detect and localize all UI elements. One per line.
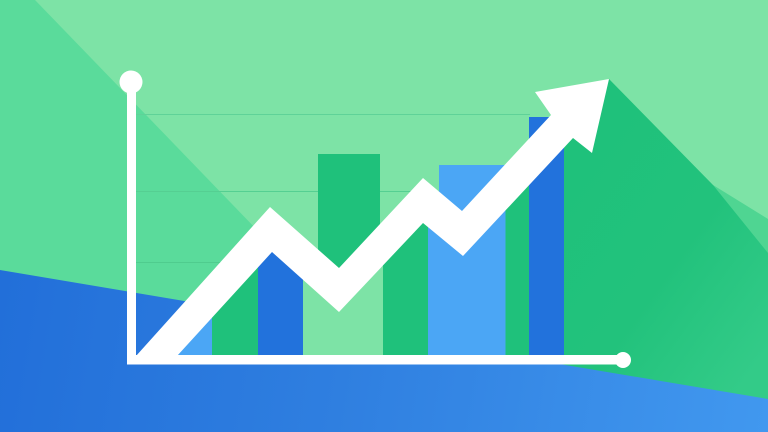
y axis end dot xyxy=(120,70,142,94)
background: right mid-green band xyxy=(700,185,768,270)
background: right dark green slope xyxy=(555,79,768,405)
x axis end dot xyxy=(615,352,631,368)
bar 8: blue xyxy=(529,117,564,356)
bar 4: green upper section xyxy=(318,154,380,290)
bar 5: green xyxy=(383,200,428,356)
bar 3: blue xyxy=(258,240,303,356)
background: blue ground xyxy=(0,270,768,432)
bar 2: green xyxy=(212,250,258,356)
bar 4: light green lower section xyxy=(303,250,383,356)
y axis xyxy=(127,82,136,364)
trend arrow xyxy=(136,79,609,356)
bar 1: light blue xyxy=(170,310,212,356)
bar 6: light blue xyxy=(428,165,506,356)
bar chart xyxy=(170,117,564,356)
grid lines xyxy=(136,114,530,262)
bar 7: green xyxy=(506,180,530,356)
x axis xyxy=(127,355,623,364)
axes xyxy=(120,70,631,368)
background: left mid-green slope xyxy=(0,0,260,310)
